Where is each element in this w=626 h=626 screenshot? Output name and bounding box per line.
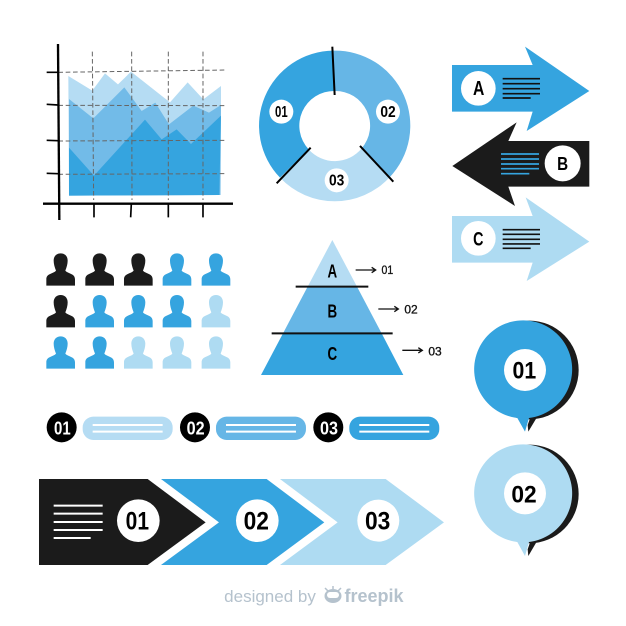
chevron 01 xyxy=(39,479,206,565)
numbered pills row xyxy=(47,412,439,442)
bubble 01: 01 xyxy=(512,357,536,384)
pointer 02 xyxy=(378,303,418,317)
pill 03: 03 xyxy=(320,417,338,438)
label 03: 03 xyxy=(329,173,344,190)
chevron 02: 02 xyxy=(244,507,269,535)
arrow A xyxy=(452,47,589,131)
label 02 xyxy=(376,100,400,124)
arrow B xyxy=(452,122,589,206)
tier C xyxy=(261,333,403,375)
speech bubbles xyxy=(474,320,579,556)
pointer 03 xyxy=(402,345,442,359)
pill 02: 02 xyxy=(187,417,205,438)
chevron 02 xyxy=(161,479,324,565)
chevron 01: 01 xyxy=(126,507,149,535)
freepik credit xyxy=(224,586,405,606)
pill 03 xyxy=(313,412,439,442)
freepik text: freepik xyxy=(344,586,405,606)
pointer 01: 01 xyxy=(381,263,393,277)
pointer 03: 03 xyxy=(428,345,442,359)
label 01 xyxy=(269,100,293,124)
tier A xyxy=(308,240,357,287)
segment 03 xyxy=(280,148,389,201)
pill 01 xyxy=(47,412,173,442)
arrows A B C xyxy=(452,47,589,281)
bubble 02 xyxy=(474,444,579,556)
donut chart xyxy=(259,47,410,201)
arrow C xyxy=(452,197,589,281)
tier letters: C xyxy=(327,343,337,364)
chevron 03: 03 xyxy=(365,507,390,535)
chevron process xyxy=(39,479,444,565)
area chart xyxy=(43,44,233,220)
chevron 03 xyxy=(280,479,444,565)
arrow C: C xyxy=(473,230,484,251)
pointer 02: 02 xyxy=(404,303,418,317)
label 01: 01 xyxy=(275,104,288,121)
label 03 xyxy=(325,168,349,192)
segment 01 xyxy=(259,51,335,178)
people pictogram grid xyxy=(46,253,230,369)
chart axes xyxy=(43,44,233,220)
tier B xyxy=(283,287,382,333)
pointer 01 xyxy=(356,263,393,277)
pyramid chart xyxy=(261,240,442,375)
designed by text: designed by xyxy=(224,587,316,606)
icon: freepik mascot xyxy=(324,586,342,603)
light area series xyxy=(68,72,221,196)
tier letters: A xyxy=(327,261,337,282)
label 02: 02 xyxy=(380,104,396,121)
dark area series xyxy=(69,116,221,196)
pill 01: 01 xyxy=(54,417,71,438)
medium area series xyxy=(69,87,221,196)
segment 02 xyxy=(333,51,410,178)
bubble 01 xyxy=(474,320,579,432)
pill 02 xyxy=(180,412,306,442)
bubble 02: 02 xyxy=(511,482,537,509)
tier letters: B xyxy=(327,301,337,322)
tier letters xyxy=(327,261,337,364)
arrow B: B xyxy=(557,153,568,174)
arrow A: A xyxy=(473,78,484,100)
